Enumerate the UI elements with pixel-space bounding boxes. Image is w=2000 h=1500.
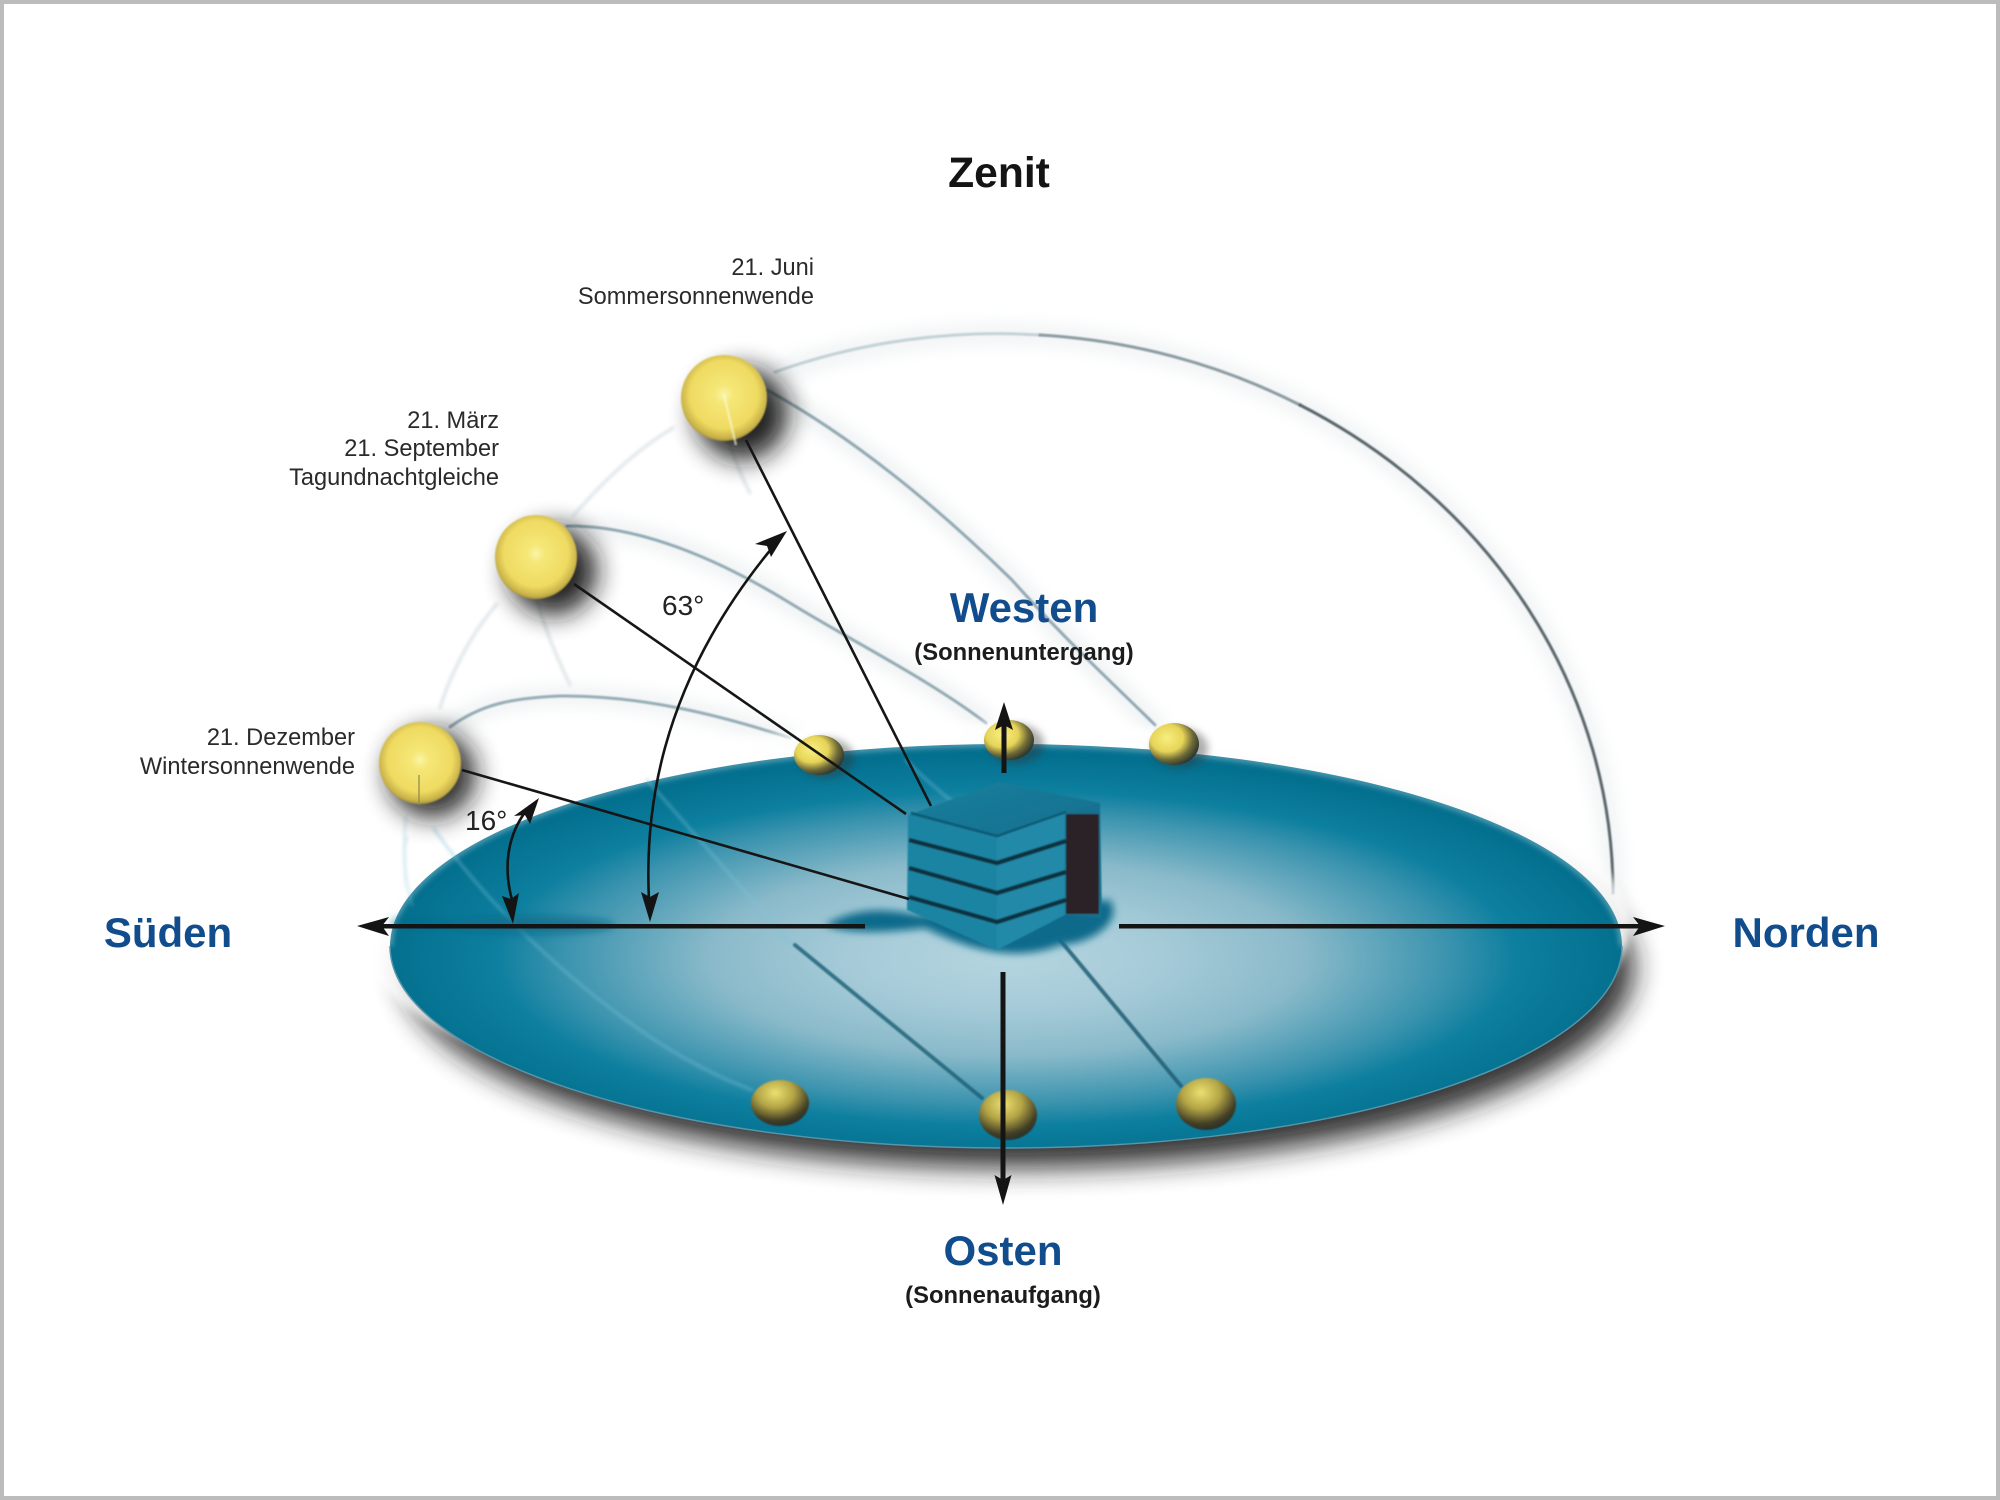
- december path: [450, 696, 790, 738]
- compass label east: [905, 1227, 1101, 1309]
- dome: december sunrise: [751, 1080, 809, 1126]
- back pillar edge: [1065, 803, 1102, 918]
- compass label north: Norden: [1732, 909, 1880, 956]
- floor lines: [909, 812, 1066, 922]
- right face: [997, 813, 1065, 950]
- far sun domes: [794, 720, 1208, 778]
- summer path: [770, 334, 1613, 893]
- building: [907, 782, 1102, 950]
- dome: summer sunrise: [1176, 1078, 1236, 1130]
- label: equinox: 21. September: [344, 436, 499, 462]
- near sun domes: [751, 1078, 1236, 1140]
- label: 21 Dezember: Wintersonnenwende: [140, 754, 355, 780]
- label: 21 Juni: 21. Juni: [731, 255, 814, 281]
- axis north: [1119, 917, 1665, 936]
- dome: summer sunset: [1149, 723, 1208, 768]
- angle arc 63 degrees: [641, 531, 787, 922]
- compass label west: Westen: [950, 584, 1098, 631]
- compass label east: (Sonnenaufgang): [905, 1282, 1101, 1309]
- disc shadow: [402, 768, 1634, 1168]
- label: equinox: 21. März: [407, 408, 499, 434]
- dome: equinox sunrise: [979, 1090, 1037, 1140]
- suns: [379, 355, 788, 818]
- label: 21 Juni: Sommersonnenwende: [578, 284, 814, 310]
- label: equinox: Tagundnachtgleiche: [289, 465, 499, 491]
- compass label west: (Sonnenuntergang): [914, 639, 1134, 666]
- angle label 63: 63°: [662, 590, 704, 621]
- march path: [567, 526, 986, 723]
- compass axes: [357, 702, 1665, 1205]
- compass label south: Süden: [104, 909, 232, 956]
- roof: [908, 782, 1100, 838]
- dark end wall: [1066, 814, 1099, 914]
- sun: 21 Dezember: [379, 722, 476, 818]
- compass label west: [914, 584, 1134, 666]
- compass label east: Osten: [943, 1227, 1063, 1274]
- sun: 21 März / 21 September: [495, 515, 597, 615]
- rays over disc: [404, 760, 1181, 1098]
- dome: equinox sunset: [984, 720, 1044, 764]
- axis west: [995, 702, 1013, 773]
- soft top edge of disc: [390, 744, 1622, 946]
- sun paths over the sky: [404, 334, 1613, 893]
- dome: december sunset: [794, 735, 854, 778]
- angle arc 16 degrees: [502, 798, 539, 924]
- disc edge: [390, 946, 1622, 1148]
- sun rays to building: [462, 440, 931, 899]
- left face: [907, 815, 997, 950]
- ghost arcs between suns: [404, 428, 750, 888]
- building shadow and axis shadows: [390, 900, 1113, 953]
- sun: 21 Juni: [681, 355, 788, 460]
- label: 21 Dezember: 21. Dezember: [207, 725, 355, 751]
- june sunset path: [767, 390, 1155, 725]
- top edge halo: [350, 723, 1630, 1127]
- horizon disc: [390, 744, 1622, 1148]
- axis south: [357, 917, 865, 936]
- ray: summer: [746, 440, 931, 806]
- title: Zenit: [948, 149, 1050, 197]
- ray: winter: [462, 770, 909, 899]
- ray: equinox: [574, 584, 906, 814]
- angle label 16: 16°: [465, 805, 507, 836]
- lines to sunrise domes: [795, 940, 1181, 1098]
- axis east: [994, 972, 1012, 1205]
